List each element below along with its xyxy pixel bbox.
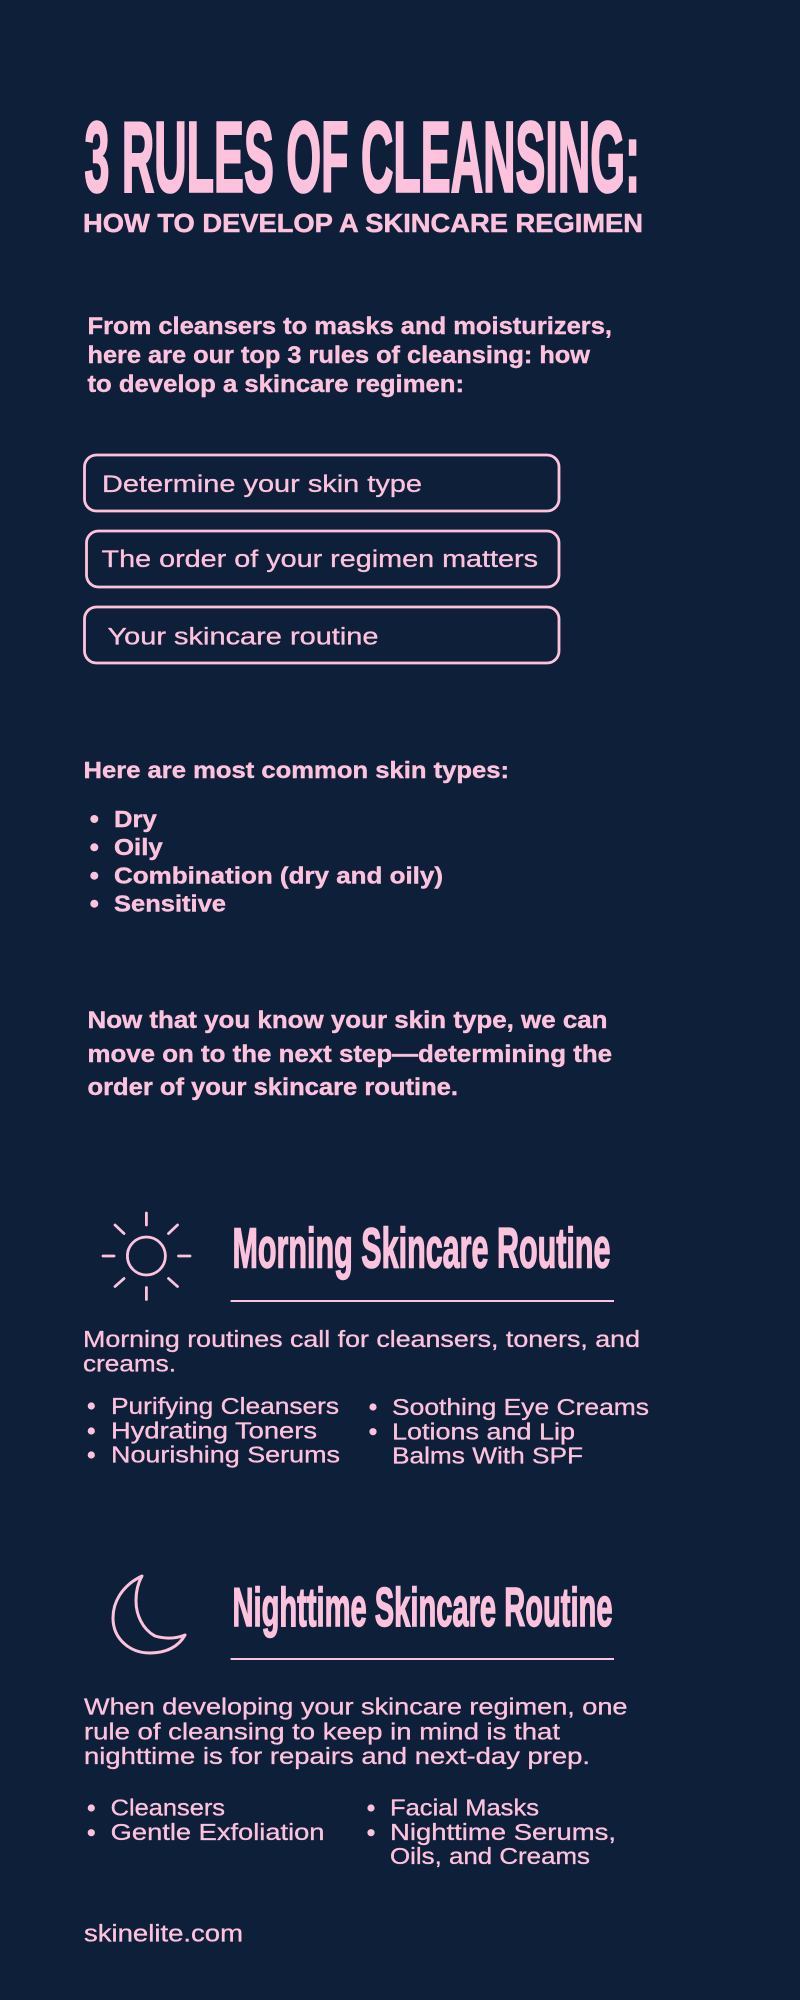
rule box 2 — [86, 531, 559, 587]
panel: common skin types — [84, 757, 509, 917]
transition paragraph: order of your skincare routine. — [88, 1074, 458, 1101]
nighttime list column 2: Facial Masks — [390, 1795, 539, 1821]
nighttime intro text: nighttime is for repairs and next-day prep. — [84, 1743, 590, 1769]
skin types list: Sensitive — [114, 891, 226, 917]
nighttime list column 2 — [367, 1795, 616, 1869]
skin types list — [90, 806, 443, 917]
panel: morning routine — [83, 1213, 649, 1469]
morning list column 1: Hydrating Toners — [111, 1418, 317, 1444]
intro paragraph: here are our top 3 rules of cleansing: how — [88, 342, 590, 369]
morning list column 2: Soothing Eye Creams — [392, 1394, 649, 1420]
morning list column 1: Purifying Cleansers — [111, 1393, 339, 1419]
nighttime intro text: When developing your skincare regimen, one — [84, 1694, 628, 1720]
morning intro text — [83, 1326, 640, 1377]
skin types list: Dry — [114, 806, 157, 832]
icon: moon — [113, 1576, 185, 1653]
skin types list: Oily — [114, 834, 163, 860]
morning intro text: creams. — [83, 1351, 176, 1377]
nighttime list column 1: Cleansers — [111, 1795, 225, 1821]
transition paragraph: Now that you know your skin type, we can — [88, 1007, 608, 1034]
icon: sun — [103, 1213, 190, 1300]
morning intro text: Morning routines call for cleansers, toners, and — [83, 1326, 640, 1352]
transition paragraph — [88, 1007, 612, 1101]
skin types list: Combination (dry and oily) — [114, 863, 443, 889]
nighttime list column 2: Oils, and Creams — [390, 1843, 590, 1869]
morning list column 1 — [88, 1393, 340, 1468]
nighttime intro text: rule of cleansing to keep in mind is that — [84, 1718, 561, 1744]
nighttime list column 1: Gentle Exfoliation — [111, 1819, 324, 1845]
intro paragraph: to develop a skincare regimen: — [88, 371, 464, 398]
panel: three rules — [84, 455, 559, 663]
nighttime list column 2: Nighttime Serums, — [390, 1819, 616, 1845]
skin types heading: Here are most common skin types: — [84, 757, 509, 783]
subtitle: HOW TO DEVELOP A SKINCARE REGIMEN — [83, 208, 643, 238]
rule box 3: Your skincare routine — [108, 624, 378, 650]
intro paragraph — [88, 313, 612, 398]
morning list column 2: Balms With SPF — [392, 1443, 583, 1469]
nighttime intro text — [84, 1694, 628, 1769]
footer website: skinelite.com — [84, 1921, 243, 1948]
intro paragraph: From cleansers to masks and moisturizers, — [88, 313, 612, 340]
morning list column 1: Nourishing Serums — [111, 1442, 340, 1468]
title block — [83, 102, 643, 238]
rule box 2: The order of your regimen matters — [102, 546, 538, 573]
morning list column 2: Lotions and Lip — [392, 1419, 575, 1445]
panel: nighttime routine — [84, 1576, 628, 1869]
rule box 3 — [84, 607, 559, 663]
morning list column 2 — [369, 1394, 649, 1469]
nighttime list column 1 — [88, 1795, 324, 1845]
transition paragraph: move on to the next step—determining the — [88, 1041, 612, 1068]
rule box 1: Determine your skin type — [102, 471, 422, 498]
rule box 1 — [84, 455, 559, 511]
